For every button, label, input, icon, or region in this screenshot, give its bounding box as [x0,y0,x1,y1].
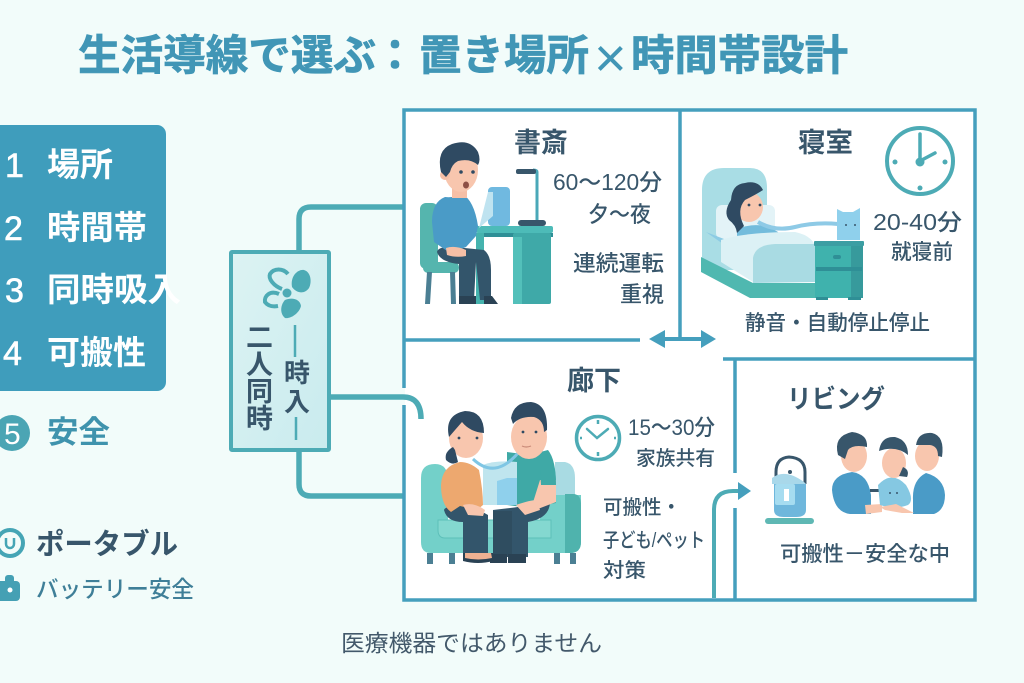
arrow: corridor to living [714,482,751,598]
arrow: study to bedroom [649,330,716,348]
criterion 3: 同時吸入 [47,271,181,308]
room: corridor [421,366,715,582]
illustration: kettle device [765,457,814,524]
text: study duration: 60～120分 [553,169,662,195]
icon: clock [887,128,953,194]
vertical label: 二人同時: 人 [246,350,273,380]
text: portability and safety: 可搬性－安全な中 [780,543,950,566]
criterion 5: safety: 安全 [47,415,110,450]
criterion 5: safety [0,415,110,451]
criterion 5: safety: 5 [4,418,21,451]
panel: two-person simultaneous inhalation [231,252,329,450]
title: × [594,26,627,89]
room: study [420,128,664,307]
criterion 1 [5,146,113,185]
connectors from two-person box [299,207,421,496]
vertical label: 時入: 時 [284,358,310,388]
battery safety label with icon: バッテリー安全 [36,576,194,602]
text: portability and child or pet safety: 可搬性・ [603,496,681,519]
text: bedroom duration: 20-40分 [873,209,962,235]
criterion 2 [4,209,147,248]
room: living [765,384,950,566]
icon: clock [576,416,620,460]
criterion 3: 3 [5,272,24,310]
text: portability and child or pet safety: 子ども/ペット [603,529,705,552]
text: before sleep: 就寝前 [891,241,953,264]
criterion 2: 時間帯 [47,209,147,246]
illustration: person in bed [701,168,864,300]
room frame [404,110,975,600]
portable label with icon: ポータブル [36,527,178,561]
vertical label: 二人同時: 時 [246,404,273,434]
vertical label: 二人同時: 同 [246,377,273,407]
heading: study: 書斎 [514,128,568,158]
heading: corridor: 廊下 [567,366,621,396]
criterion 2: 2 [4,210,23,248]
panel: criteria list [0,125,181,391]
heading: bedroom: 寝室 [798,128,853,158]
title: 置き場所 [419,32,589,79]
heading: living: リビング [787,384,885,414]
illustration: person at desk [420,142,553,304]
vertical label: 時入: 入 [284,387,310,417]
room: bedroom [701,128,962,335]
footer disclaimer: 医療機器ではありません [341,630,602,656]
text: study time of day: 夕～夜 [588,202,651,227]
text: family sharing: 家族共有 [636,447,715,470]
vertical label: 二人同時: 二 [246,323,273,353]
text: portability and child or pet safety [603,496,705,582]
title [78,26,848,89]
criterion 1: 1 [5,147,24,185]
criterion 1: 場所 [47,146,113,183]
illustration: couple on sofa [421,402,581,564]
text: portability and child or pet safety: 対策 [603,559,646,582]
icon: fan [265,270,311,318]
text: quiet and auto stop: 静音・自動停止停止 [745,312,930,335]
illustration: family of three [832,432,945,514]
criterion 4: 可搬性 [47,334,146,371]
title: ： [374,32,416,79]
title: 時間帯設計 [631,32,848,79]
text: corridor duration: 15～30分 [628,415,715,440]
vertical label: 時入 [284,325,310,440]
text: continuous operation: 連続運転 [573,251,664,276]
title: 生活導線で選ぶ [78,32,376,79]
criterion 4 [3,334,146,373]
criterion 4: 4 [3,335,22,373]
text: priority: 重視 [620,282,664,307]
